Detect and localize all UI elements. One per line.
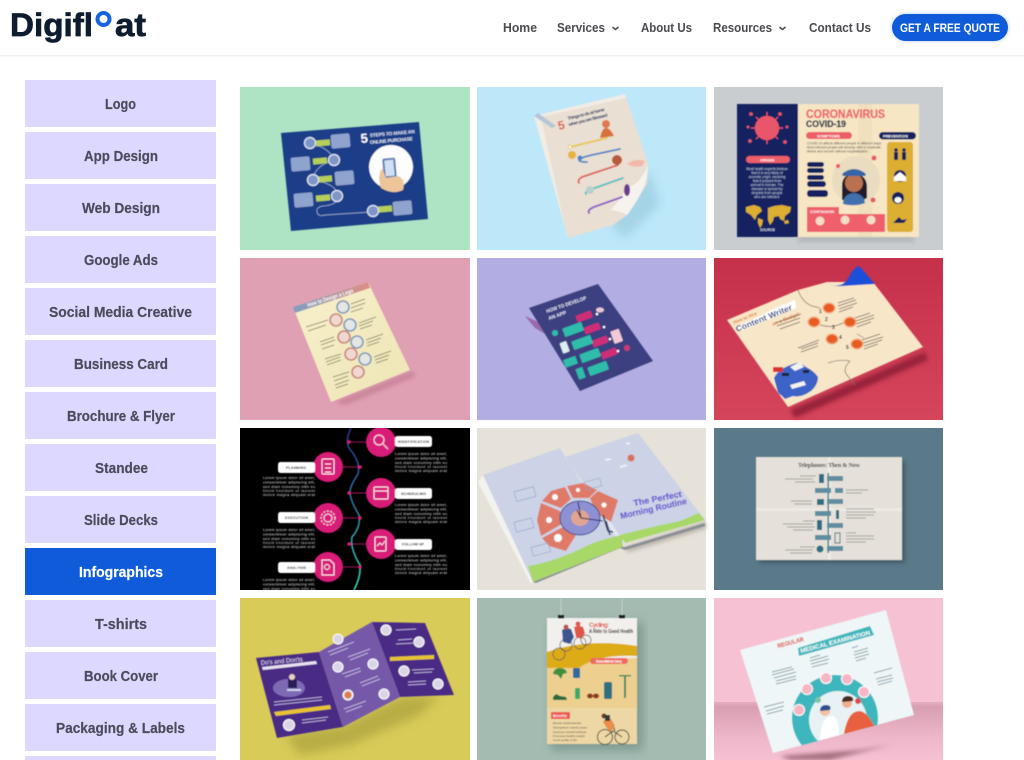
- menu item: Brochure & Flyer: Brochure & Flyer: [67, 409, 175, 425]
- gallery tile: coronavirus infographic: disease is spread by: [752, 187, 783, 191]
- menu item: Business Card: Business Card: [74, 357, 168, 373]
- gallery tile: cycling poster: Boosts cardiovascular: [553, 721, 581, 725]
- gallery tile: dark timeline infographic: consectetuer adipiscing elit,: [263, 532, 315, 536]
- menu item: Packaging & Labels: [25, 704, 216, 751]
- gallery tile: dark timeline infographic: consectetuer adipiscing elit,: [395, 558, 447, 562]
- menu item: Brochure & Flyer: [25, 392, 216, 439]
- gallery tile: coronavirus infographic: SYMPTOMS: [817, 134, 840, 138]
- gallery tile: hire a content writer: 4: [839, 335, 842, 341]
- menu item: Packaging & Labels: Packaging & Labels: [56, 721, 185, 737]
- gallery tile: coronavirus infographic: droplets from people: [752, 191, 783, 195]
- menu item: Web Design: Web Design: [82, 201, 160, 217]
- menu item: Google Ads: [25, 236, 216, 283]
- gallery tile: hire a content writer: 5: [846, 345, 849, 351]
- gallery tile: dark timeline infographic: Lorem ipsum dolor sit amet,: [263, 528, 315, 532]
- menu item: Logo: [25, 80, 216, 127]
- gallery tile: dark timeline infographic: Lorem ipsum dolor sit amet,: [263, 578, 315, 582]
- menu item: T-shirts: [25, 600, 216, 647]
- gallery tile: hire a content writer: 3: [832, 325, 835, 331]
- gallery tile: online purchase infographic: 5: [360, 130, 368, 146]
- gallery tile: coronavirus infographic: Most infected people will develop mild to moderate: [807, 146, 881, 150]
- menu item: App Design: App Design: [84, 149, 158, 165]
- gallery tile: online purchase infographic: STEPS TO MAKE AN: [370, 129, 416, 139]
- gallery tile: dark timeline infographic: Lorem ipsum dolor sit amet,: [395, 503, 447, 507]
- gallery tile: cycling poster: Improves mental wellness: [553, 730, 587, 734]
- gallery tile: coronavirus infographic: ORIGIN: [760, 158, 774, 162]
- menu item: Business Card: [25, 340, 216, 387]
- menu item: Infographics (active): [25, 548, 216, 595]
- gallery tile: cycling poster: Essentials to Carry: [596, 660, 623, 664]
- gallery tile: dark timeline infographic: dolore magna aliquam erat: [395, 571, 447, 575]
- menu item: Social Media Creative: Social Media Creative: [49, 305, 192, 321]
- gallery tile: telephones then and now: [714, 428, 943, 590]
- illustration: cyclist with backpack: [598, 730, 629, 744]
- gallery tile: coronavirus infographic: COVID-19 affects different people in different ways.: [807, 142, 882, 146]
- gallery tile: dark timeline infographic: dolore magna aliquam erat: [395, 520, 447, 524]
- gallery tile: coronavirus infographic: PREVENTION: [883, 134, 908, 138]
- gallery tile: dark timeline infographic: PLANNING: [286, 466, 306, 470]
- menu item: Google Ads: Google Ads: [84, 253, 158, 269]
- gallery tile: online purchase infographic: ONLINE PURCHASE: [370, 136, 414, 146]
- gallery tile: hire a content writer: 1: [819, 309, 822, 315]
- gallery tile: cycling poster: A Ride to Good Health: [589, 629, 633, 635]
- gallery tile: hire a content writer: Content Writer: [734, 303, 793, 334]
- call to action button: [892, 14, 1008, 41]
- gallery tile: coronavirus infographic: that it jumped from: [753, 179, 781, 183]
- gallery tile: how to develop an app: [477, 258, 706, 420]
- menu item: Web Design: [25, 184, 216, 231]
- illustration: two cyclists: [553, 635, 591, 660]
- world map: [746, 205, 791, 228]
- navigation menu: [503, 21, 871, 35]
- gallery tile: dark timeline infographic: SCHEDULING: [401, 492, 426, 496]
- gallery tile: how to develop an app: HOW TO DEVELOP: [546, 295, 588, 315]
- gallery tile: dark timeline infographic: sed diam nonummy nibh eu: [395, 563, 447, 567]
- gallery tile: cycling poster: Cycling:: [589, 623, 609, 629]
- gallery tile: coronavirus infographic: zoonotic origin, meaning: [749, 175, 785, 179]
- gallery tile: dark timeline infographic: ANALYSIS: [287, 566, 307, 570]
- gallery tile: dark timeline infographic: consectetuer adipiscing elit,: [395, 508, 447, 512]
- gallery tile: dark timeline infographic: Lorem ipsum dolor sit amet,: [263, 476, 315, 480]
- gallery tile: cycling poster: Strengthens muscle power: [553, 726, 587, 730]
- gallery tile: regular medical examination: [714, 598, 943, 760]
- logo: Digifloat: Digifl: [10, 7, 93, 43]
- gallery tile: regular medical examination: REGULAR: [777, 637, 805, 650]
- gallery tile: hire a content writer: on a Budget: [772, 311, 801, 328]
- gallery tile: paper sheet infographic: 5: [556, 118, 567, 133]
- illustration: blue car: [774, 363, 818, 399]
- gallery tile: paper sheet infographic: when you are Stressed: [567, 112, 608, 127]
- navigation menu: Resources: [713, 21, 772, 35]
- menu item: App Design: [25, 132, 216, 179]
- navigation menu: Contact Us: [809, 21, 871, 35]
- gallery tile: dark timeline infographic: IDENTIFICATION: [398, 440, 429, 444]
- gallery tile: dark timeline infographic: [240, 427, 470, 591]
- gallery tile: dark timeline infographic: sed diam nonummy nibh eu: [263, 485, 315, 489]
- menu item: Logo: Logo: [105, 97, 136, 113]
- gallery tile: telephones then and now: Telephones: Then & Now: [798, 463, 861, 469]
- gallery tile: perfect morning routine book: The Perfect: [632, 489, 683, 508]
- gallery tile: cycling poster: Promotes healthy weight: [553, 734, 585, 738]
- gallery tile: perfect morning routine book: [477, 428, 706, 590]
- gallery tile: dark timeline infographic: EXECUTION: [285, 516, 308, 520]
- gallery tile: dark timeline infographic: tincid tincidunt ut laoreet: [263, 541, 315, 545]
- sidebar category menu: [25, 80, 216, 760]
- gallery tile: cycling poster: Good quality of life: [553, 738, 577, 742]
- call to action button: GET A FREE QUOTE: [900, 21, 1000, 35]
- gallery tile: coronavirus infographic: who are infected.: [754, 195, 780, 199]
- menu item: Slide Decks: Slide Decks: [84, 513, 158, 529]
- gallery tile: dark timeline infographic: tincid tincidunt ut laoreet: [395, 516, 447, 520]
- logo: Digifloat: at: [115, 7, 146, 43]
- gallery tile: paper sheet infographic: [477, 87, 706, 250]
- gallery tile: dark timeline infographic: consectetuer adipiscing elit,: [263, 480, 315, 484]
- gallery tile: dark timeline infographic: dolore magna aliquam erat: [263, 545, 315, 549]
- navigation menu: Services: [557, 21, 605, 35]
- menu item: Slide Decks: [25, 496, 216, 543]
- gallery tile: dark timeline infographic: sed diam nonummy nibh eu: [263, 537, 315, 541]
- gallery tile: dark timeline infographic: Lorem ipsum dolor sit amet,: [395, 452, 447, 456]
- gallery tile: dark timeline infographic: dolore magna aliquam erat: [395, 469, 447, 473]
- gallery tile: dark timeline infographic: FOLLOW UP: [402, 542, 425, 546]
- gallery tile: perfect morning routine book: Morning Routine: [619, 496, 688, 521]
- menu item: Standee: [25, 444, 216, 491]
- menu item: Social Media Creative: [25, 288, 216, 335]
- gallery tile: dark timeline infographic: consectetuer adipiscing elit,: [263, 582, 315, 586]
- gallery tile: coronavirus infographic: [714, 87, 943, 250]
- menu item: Infographics (active): Infographics: [79, 565, 163, 581]
- gallery tile: coronavirus infographic: that it is very likely of: [751, 171, 783, 175]
- gallery tile: coronavirus infographic: Most health experts believe: [746, 167, 788, 171]
- icon: virus: [747, 112, 788, 144]
- gallery tile: hire a content writer: [714, 258, 943, 420]
- gallery tile: dark timeline infographic: sed diam nonummy nibh eu: [263, 587, 315, 591]
- gallery tile: dos and don'ts trifold: Do's and Don'ts: [261, 656, 304, 667]
- gallery tile: dark timeline infographic: sed diam nonummy nibh eu: [395, 461, 447, 465]
- gallery tile: dark timeline infographic: tincid tincidunt ut laoreet: [395, 567, 447, 571]
- gallery tile: how to design a logo: How to Design a Logo: [307, 288, 355, 309]
- gallery tile: dos and don'ts trifold: [240, 598, 470, 760]
- gallery tile: coronavirus infographic: COVID-19: [806, 119, 846, 129]
- gallery tile: dark timeline infographic: consectetuer adipiscing elit,: [395, 456, 447, 460]
- menu item: Book Cover: [25, 652, 216, 699]
- navigation menu: About Us: [641, 21, 692, 35]
- gallery tile: paper sheet infographic: Things to do at home: [567, 107, 606, 121]
- gallery tile: regular medical examination: MEDICAL EXAMINATION: [800, 631, 871, 655]
- gallery tile: dark timeline infographic: tincid tincidunt ut laoreet: [395, 465, 447, 469]
- clock diagram: [537, 483, 618, 551]
- illustration: girl in mask: [832, 156, 880, 204]
- gallery tile: cycling poster: [477, 598, 706, 760]
- gallery tile: dark timeline infographic: dolore magna aliquam erat: [263, 493, 315, 497]
- gallery tile: how to develop an app: AN APP: [548, 310, 568, 322]
- menu item: partially visible: [25, 756, 216, 760]
- logo: Digifloat: [10, 7, 146, 43]
- menu item: Standee: Standee: [95, 461, 148, 477]
- gallery tile: dark timeline infographic: Lorem ipsum dolor sit amet,: [395, 554, 447, 558]
- gallery tile: how to design a logo: [240, 258, 470, 420]
- gallery tile: online purchase infographic: [240, 87, 470, 250]
- menu item: T-shirts: T-shirts: [95, 617, 147, 633]
- site header: [0, 0, 1024, 56]
- gallery tile: coronavirus infographic: SOURCE: [760, 228, 776, 232]
- gallery tile: coronavirus infographic: CORONAVIRUS: [806, 107, 885, 121]
- menu item: Book Cover: Book Cover: [84, 669, 158, 685]
- navigation menu: Home: [503, 21, 537, 35]
- gallery tile: hire a content writer: How to Hire: [733, 311, 758, 325]
- gallery tile: coronavirus infographic: CONTAGION: [810, 209, 834, 214]
- gallery tile: hire a content writer: 2: [825, 317, 828, 323]
- gallery tile: coronavirus infographic: animal to human. The: [751, 183, 783, 187]
- gallery tile: cycling poster: Benefits: [553, 714, 567, 718]
- gallery tile: dark timeline infographic: tincid tincidunt ut laoreet: [263, 489, 315, 493]
- gallery tile: coronavirus infographic: illness and recover without hospitalisation.: [807, 150, 869, 154]
- gallery tile: dark timeline infographic: sed diam nonummy nibh eu: [395, 512, 447, 516]
